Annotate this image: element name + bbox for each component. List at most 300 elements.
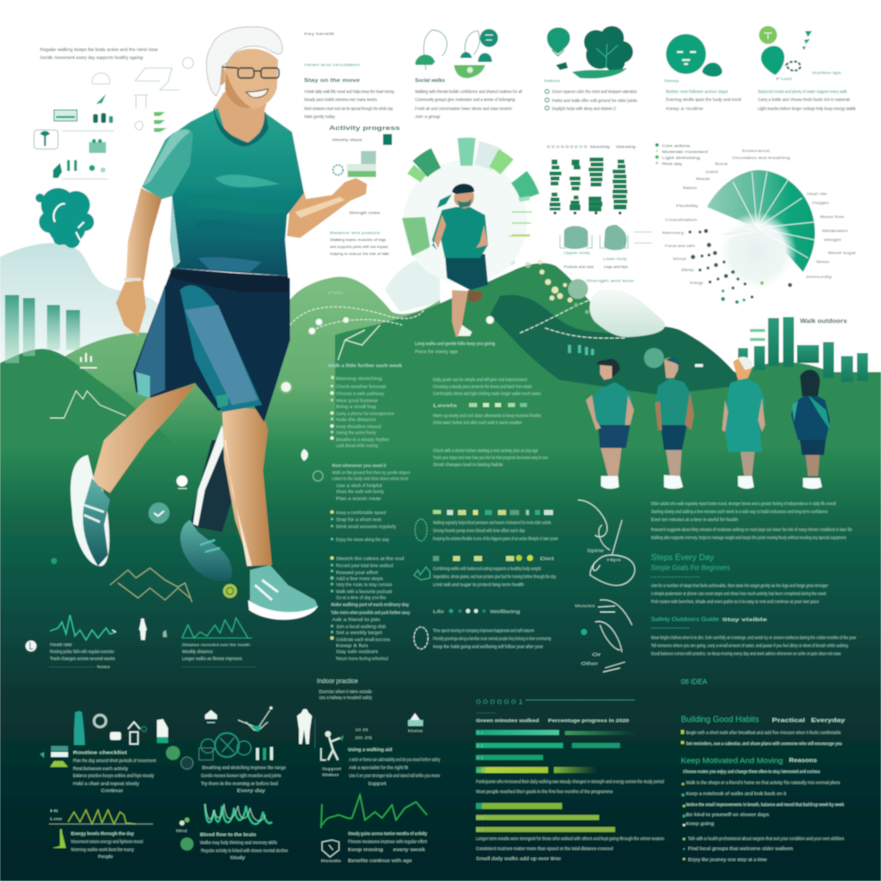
chips row 3 with text: Vegetables, whole grains, and lean protein give fuel for moving further through the day (433, 574, 556, 579)
stacked trees chart: Weekly (616, 144, 636, 149)
checklist column: Add a few more steps (336, 576, 384, 581)
head (224, 49, 278, 109)
right lower panel: key points: Building Good Habits (681, 714, 759, 724)
right lower panel: key points: Everyday (811, 718, 845, 724)
right lower panel: key points: Talk with a health professional about targets that suit your condition and your own abilities (688, 836, 845, 841)
radial chart legend: Rest day (662, 161, 682, 166)
lower panel 3: figures: Walker (322, 772, 340, 777)
bottom sparkline 1: People (98, 854, 113, 859)
checklist column: Join a local walking club (336, 624, 386, 629)
radial chart labels: Energy (690, 280, 703, 285)
checklist column: Record your total time walked (336, 563, 393, 568)
bottom sparkline 3: Results (321, 858, 341, 863)
text: Aim for a number of steps that feels achievable, then raise the target gently as the legs and lungs grow stronger (651, 583, 828, 588)
column 1 heading and text: Join a group (415, 114, 440, 119)
chips row 3 with text: Combining walks with balanced eating supports a healthy body weight (433, 566, 542, 571)
dots row: Wellbeing (490, 609, 521, 614)
sparkline panel 2 (182, 618, 256, 667)
checklist column: Set a weekly target (336, 630, 383, 635)
right lower panel: key points: Set reminders, use a calendar, and share plans with someone who will encourage you (686, 741, 842, 746)
lower panel 3: figures: 20 25 (355, 735, 373, 740)
left hill note (80, 353, 97, 368)
right lower panel: key points: Choose routes you enjoy and change them often to stay interested and curious (683, 769, 820, 774)
lower panel 1: text: Rest between each activity (73, 766, 129, 771)
icon cluster 4 (759, 26, 841, 75)
anatomy labels (575, 548, 621, 666)
checklist column: Wear good footwear (336, 398, 378, 403)
centre text block: column above arm: Key benefit (304, 32, 334, 36)
centre text block: column above arm: Stay on the move (304, 78, 360, 84)
dots row: Friendly greetings along a familiar route remind people they belong to their community (433, 636, 551, 641)
right lower panel: key points: Begin with a short walk after breakfast and add five minutes when it feels comfortable (686, 730, 841, 735)
checklist column: Note the distance (336, 417, 376, 422)
skyline label: Walk outdoors (800, 319, 848, 325)
radial chart labels: Mood (673, 256, 686, 261)
lower panel 1: text: Plan the day around short periods of movement (73, 758, 157, 763)
radial chart labels: Weight (824, 237, 842, 242)
sparkline panel 2: Weekly distance (182, 649, 213, 654)
anatomy labels: Spine (587, 548, 605, 553)
left city skyline (5, 295, 80, 363)
right arm (287, 178, 367, 238)
left arm (126, 188, 162, 280)
heading: steps: Steps Every Day (651, 553, 714, 562)
checklist column: Check weather forecast (336, 384, 387, 389)
bar chart panel: Participants who increased their daily walking saw steady changes in strength and energy across the study period (476, 779, 664, 784)
column 3 text: Evening strolls quiet the body and mind (666, 97, 741, 102)
anatomy labels: Or (592, 652, 602, 657)
bottom sparkline 1: Hi (50, 809, 59, 813)
radial chart labels: Balance (683, 185, 698, 190)
body silhouettes with labels (560, 225, 652, 283)
checklist column: Go at a time of day you like (336, 595, 386, 600)
icon cluster 1 (415, 29, 498, 78)
center column text on hill: Comfortable shoes and light clothing make longer walks much easier (433, 391, 541, 396)
lower section heading: Use a hallway or treadmill safely (319, 695, 373, 700)
radial chart labels: Muscle (696, 176, 711, 181)
anatomy line drawings (578, 500, 635, 672)
bottom sparkline 1: Low (50, 817, 63, 821)
trail route lines (290, 300, 625, 360)
lower panel 3: figures: Support (322, 766, 342, 771)
checklist column: Swing the arms freely (336, 430, 377, 435)
walker 2 (655, 358, 694, 489)
column 1 heading and text: Walking with friends builds confidence and shared routines for all (415, 89, 522, 94)
right lower panel: key points: Keep Motivated And Moving (681, 758, 783, 765)
walker 3 (722, 357, 765, 489)
column 4 text: Carry a bottle and choose fresh foods rich in nutrients (758, 97, 851, 102)
checklist column: Stretch the calves at the end (336, 556, 405, 561)
bottom sparkline 1: Energy levels through the day (71, 831, 134, 836)
checklist column: Breathe in a steady rhythm (336, 437, 389, 442)
checklist column (330, 376, 411, 661)
lower panel 1: text (73, 750, 157, 793)
bar chart panel: Consistent routines matter more than speed or the total distance covered (476, 846, 613, 851)
far leg (190, 440, 232, 532)
centre text block: column above arm: Start gently today (304, 114, 336, 119)
checklist column: Enjoy the views along the way (336, 537, 390, 542)
checklist column: Morning stretching (336, 376, 383, 381)
radial chart labels: Sleep (681, 267, 695, 272)
bar chart panel: Green minutes walked (476, 718, 539, 723)
lower panel 2: icons (199, 706, 273, 760)
brain icon (36, 188, 94, 248)
checklist column: Reward your effort (336, 570, 379, 575)
text under arm: and supports joints with low impact (330, 244, 389, 249)
chips row 2 with text: Strong hearts pump more blood with less effort each day (433, 528, 526, 533)
mountain line chart (110, 568, 192, 602)
right text block with headings (651, 501, 852, 540)
body silhouettes with labels: Posture and core (564, 265, 594, 269)
column 4 text: Light snacks before longer outings help keep energy stable (758, 106, 856, 111)
sparkline panel 1: Track changes across several weeks (50, 656, 116, 661)
top-left outline icons (34, 58, 194, 179)
centre text block: column above arm: Heart and circulation (304, 62, 360, 67)
column 3 text (664, 78, 741, 111)
center column text on hill: Track your steps and note how you feel so that progress becomes easy to see (433, 455, 548, 460)
right lower panel: key points: Keep a notebook of walks and look back on it (686, 791, 787, 796)
center column text on hill: Daily goals can be simple and still give real improvement (433, 377, 528, 382)
bottom sparkline 2: Walks may help thinking and memory skills (200, 840, 278, 845)
sparkline panel 1: Notes (97, 664, 110, 669)
lower panel 3: figures (297, 709, 423, 777)
center column text on hill (328, 291, 548, 467)
right lower panel: key points: Keep going (686, 821, 715, 826)
bar chart panel: Longer term results were strongest for those who walked with others and kept going through the winter season (476, 836, 664, 841)
lower panel 3: text: A stick or frame can add stability and let you travel further safely (349, 757, 440, 762)
sparkline panel 1 (49, 615, 167, 669)
checklist column: Ask a friend to join (332, 617, 381, 622)
column 2 heading and checklist: Daylight helps with sleep and vitamin D (552, 106, 617, 111)
anatomy labels: Muscles (575, 603, 595, 608)
center column text on hill: Choosing a steady pace protects the knees and back from strain (433, 384, 532, 389)
fan chart around small runner (402, 152, 532, 284)
right lower panel: key points: Enjoy the journey one step at a time (688, 857, 767, 862)
checklist column: Celebrate each small success (336, 637, 391, 642)
lower panel 1: icons (40, 711, 193, 769)
text under arm: Walking trains muscles of legs (330, 237, 386, 242)
anatomy labels: Other (581, 661, 599, 666)
hair (206, 27, 282, 96)
lower panel 3: text: Support (368, 781, 387, 786)
radial chart labels: Stress (816, 259, 829, 264)
checklist column: Stay safe outdoors (336, 649, 379, 654)
bar chart panel: 06 (477, 816, 483, 820)
bar chart panel: 04 (477, 769, 483, 773)
lower panel 3: text: Using a walking aid (348, 747, 392, 752)
bottom sparkline 1: Movement raises energy and lightens mood (71, 839, 143, 844)
chips row 3 with text (433, 555, 556, 587)
right lower panel: key points: Walk to the shops or a friend's home so that activity fits naturally into normal plans (686, 780, 841, 785)
chips row 2 with text (433, 510, 558, 541)
smile (246, 89, 268, 98)
bar chart panel: 01 (477, 731, 483, 735)
right lower panel: key points (681, 679, 845, 862)
sparkline panel 2: Longer walks as fitness improves (182, 656, 243, 661)
radial chart labels: Immunity (806, 274, 832, 279)
bottom sparkline 2: Regular activity is linked with slower mental decline (201, 848, 288, 853)
heading: steps (651, 553, 730, 572)
column 3 text: Better rest follows active days (666, 89, 729, 94)
lower panel 2: text: Try them in the morning or before bed (201, 781, 278, 786)
checklist column: Share the walk with family (336, 489, 385, 494)
radial chart (707, 170, 815, 292)
lower panel 3: text: Ask a specialist for the right fit (349, 765, 409, 770)
radial chart legend (655, 143, 709, 166)
small hill bubbles and bars (568, 329, 765, 368)
text under arm: Strength notes (349, 211, 380, 215)
column 2 heading and checklist: Nature (544, 78, 561, 83)
heading: steps: Simple Goals For Beginners (651, 565, 730, 572)
center column text on hill: Small changes lead to lasting habits (433, 462, 504, 467)
center column text on hill: Check with a doctor before starting a new activity plan at any age (433, 448, 538, 453)
checklist column: Keep a comfortable speed (336, 510, 386, 515)
center column text on hill: Drink water before and after each walk in warm weather (433, 420, 522, 425)
radial chart labels: Bone (715, 161, 729, 166)
checklist column: Keep shoulders relaxed (336, 424, 381, 429)
top-left caption (40, 47, 158, 60)
column 3 text: Keep a routine (666, 106, 704, 111)
center column text on hill: Long walks and gentle hills keep you going (415, 341, 495, 346)
small circular icons in field (26, 381, 323, 652)
sparkline panel 1: Heart rate (50, 642, 72, 647)
small runner (432, 184, 488, 337)
icon cluster 2: tree and balloon (547, 26, 633, 79)
checklist column: Choose a safe pathway (336, 391, 385, 396)
text under arm (330, 211, 389, 256)
radial chart labels: Joint (705, 169, 719, 174)
checklist column: Listen to the body and slow down when tired (332, 476, 408, 481)
leaf icon (414, 567, 430, 580)
lower panel 2: text: Every day (237, 788, 266, 793)
stacked trees chart: Monthly (590, 144, 610, 149)
column 4 text: Fuel (776, 76, 792, 81)
sparkline panel 1: Resting pulse falls with regular exercise (50, 649, 114, 654)
column 2 heading and checklist (544, 78, 638, 111)
right city skyline (738, 317, 868, 382)
bar chart panel: 0 0 0 0 0 0 1 (476, 700, 524, 706)
sparkline panel 2: Distance recorded over the month (182, 642, 250, 647)
column 1 heading and text: Fresh air and conversation lower stress and ease tension (415, 106, 512, 111)
bar chart panel: 02 (477, 744, 483, 748)
lower panel 1: text: Continue (101, 788, 124, 793)
bottom sparkline 2 (176, 804, 288, 860)
bar chart panel: Small daily walks add up over time (476, 856, 562, 861)
chips row 2 with text: Keeping the arteries flexible is one of the biggest gains of an active lifestyle in later years (433, 536, 558, 541)
radial chart labels (662, 148, 857, 285)
text under arm: Balance and posture (330, 230, 381, 235)
lower panel 2: text (201, 765, 286, 793)
right lower panel: key points: Reasons (789, 758, 817, 764)
column 4 text (758, 76, 856, 111)
checklist column: Carry a phone for emergencies (336, 411, 395, 416)
ear (216, 67, 226, 85)
dots row: Keep the habit going and wellbeing will follow year after year (433, 644, 543, 649)
center column text on hill: Walk a little further each week (328, 363, 403, 368)
center column text on hill: Pace for every age (415, 349, 458, 354)
lower panel 1: text: Routine checklist (73, 750, 128, 755)
bar chart panel (476, 700, 664, 861)
radial chart labels: Focus and calm (665, 243, 696, 248)
lower panel 3: text (348, 747, 440, 786)
checklist column: Rest whenever you need it (332, 463, 386, 468)
radial chart labels: Endurance (742, 148, 771, 153)
lower section heading: Indoor practice (317, 679, 359, 685)
subheading: safety: Safety Outdoors Guide (651, 617, 719, 623)
anatomy labels: Hips (607, 557, 621, 562)
bar chart panel: 03 (477, 756, 483, 760)
radial chart legend: Moderate movement (662, 149, 709, 154)
checklist column: Stop for a short rest (336, 517, 382, 522)
bottom sparkline 3: Keep moving (348, 847, 384, 852)
radial chart labels: Heart rate (807, 191, 828, 196)
bottom sparkline 3 (321, 795, 428, 863)
column 2 heading and checklist: Parks and trails offer soft ground for older joints (552, 98, 638, 103)
radial chart labels: Oxygen (812, 200, 829, 205)
glasses (222, 67, 279, 78)
column 1 heading and text: Community groups give motivation and a sense of belonging (415, 97, 515, 102)
neck (214, 92, 270, 144)
center column text on hill: Warm up slowly and cool down afterwards to keep muscles flexible (433, 413, 541, 418)
lower panel 3: figures: Home (408, 729, 423, 733)
left ridge line (50, 391, 126, 418)
right lower panel: key points: Find local groups that welcome older walkers (688, 846, 794, 851)
radial chart labels: Blood sugar (828, 250, 857, 255)
radial chart labels: Metabolism (822, 228, 849, 233)
icon cluster 4: Nutrition tips (812, 70, 841, 75)
bar chart panel: 07 (477, 828, 483, 832)
bar chart panel: Percentage progress in 2020 (548, 718, 630, 723)
bottom sparkline 2: Study (230, 855, 246, 860)
column 3 text: Sleep (664, 78, 680, 83)
t-shirt (142, 108, 304, 276)
subheading: safety (651, 617, 768, 623)
body silhouettes with labels: Lower body (603, 257, 627, 261)
centre text block: column above arm (304, 32, 394, 119)
flowers on the hilltop (503, 249, 589, 314)
chips row 3 with text: Limit salt and sugar to protect long term health (433, 582, 524, 587)
group of four walkers (586, 357, 830, 489)
stacked trees chart: 0 0 0 0 0 0 0 0 0 (547, 144, 588, 149)
shoe: front (250, 565, 318, 617)
body silhouettes with labels: Legs and hips (604, 265, 628, 269)
walker 4 (791, 370, 830, 489)
dots row: Time spent moving in company improves happiness and self esteem (433, 628, 534, 633)
back thigh and calf (92, 384, 196, 493)
checklist column: Bring a small bag (336, 404, 376, 409)
radial chart dots (688, 229, 792, 304)
checklist column: Look ahead while moving (336, 443, 378, 448)
shorts (133, 268, 290, 422)
checklist column: Take stairs when possible and park further away (331, 610, 410, 615)
bottom sparkline 3: Steady gains across twelve months of activity (348, 831, 427, 836)
bar chart panel: Most people reached their goals in the first few months of the programme (476, 789, 613, 794)
centre text block: column above arm: Short sessions count and can be spread through the whole day (304, 106, 393, 111)
subheading: safety: Stay visible (722, 617, 768, 622)
top-left pictograms (40, 94, 167, 178)
checklist column: Walk with a favourite podcast (336, 589, 393, 594)
chips row 2 with text: Walking regularly helps blood pressure and lowers cholesterol for most older adults (433, 520, 551, 525)
centre text block: column above arm: Steady pace builds stamina over many weeks (304, 97, 378, 102)
checklist column: Drink small amounts regularly (336, 524, 397, 529)
lower panel 1: text: Balance practice keeps ankles and hips steady (73, 773, 155, 778)
checklist column: Vary the route to stay curious (336, 582, 393, 587)
small chart with heading: Activity progress (329, 126, 401, 132)
bottom sparkline 2: Mind (176, 829, 187, 833)
lower panel 3: figures: 10 15 (355, 727, 369, 732)
lower panel 2: text: Breathing and stretching improve the range (202, 765, 286, 770)
column 1 heading and text (415, 78, 522, 119)
bottom sparkline 3: Benefits continue with age (348, 858, 413, 863)
bottom sparkline 1 (49, 809, 153, 859)
right lower panel: key points: Notice the small improvements in breath, balance and mood that build up week by week (686, 802, 844, 807)
dots row (433, 609, 551, 649)
chips row 3 with text: Diet (540, 556, 555, 561)
radial chart legend: Core actions (662, 143, 690, 148)
top-left caption: Gentle movement every day supports healthy ageing (40, 55, 143, 60)
dots row: Life (433, 609, 445, 614)
right lower panel: key points: Be kind to yourself on slower days (686, 812, 770, 817)
bottom sparkline 3: every week (393, 847, 426, 852)
bottom sparkline 3: Fitness measures improve with regular effort (348, 839, 428, 844)
walker 1 (586, 359, 634, 489)
front leg (222, 405, 272, 566)
text: A simple pedometer or phone can count steps and show how much activity has been completed during the week (651, 591, 827, 596)
radial chart labels: Flexibility (676, 203, 698, 208)
right lower panel: key points: 08 IDEA (681, 679, 707, 686)
right text block with headings: Even ten minutes at a time is useful for health (651, 517, 738, 522)
column 2 heading and checklist: Green spaces calm the mind and sharpen attention (552, 89, 637, 94)
checklist column: Keep it fun (336, 643, 369, 648)
oval icon 1 (415, 519, 427, 541)
checklist column: Return home feeling refreshed (336, 656, 388, 661)
bottom sparkline 2: Blood flow to the brain (200, 832, 256, 837)
lower panel 3: text: Use it on your stronger side and stand tall while you move (349, 773, 440, 778)
checklist column: Make walking part of each ordinary day (331, 602, 409, 607)
lower section heading: Exercise when it rains outside (319, 689, 372, 694)
main runner: elderly walker (71, 27, 367, 620)
bracelet (124, 278, 141, 281)
legend chips row 1 (433, 403, 527, 408)
body silhouettes with labels: Strength and tone (586, 278, 635, 283)
column 4 text: Balanced meals and plenty of water support every walk (758, 89, 848, 94)
lower section heading (317, 679, 373, 700)
body silhouettes with labels: Upper body (564, 251, 590, 255)
legend chips row 1: Levels (433, 403, 458, 408)
radial chart labels: Blood flow (820, 214, 844, 219)
text under arm: helping to reduce the risk of falls (330, 251, 389, 256)
left hand (116, 280, 146, 336)
radial chart labels: Circulation and breathing (732, 155, 790, 160)
radial chart labels: Coordination (665, 217, 697, 222)
centre text block: column above arm: A brisk daily walk lifts mood and helps keep the heart strong (304, 89, 394, 94)
text: Pick routes with benches, shade and even paths so it is easy to rest and continue at your own pace (651, 599, 819, 604)
shoe: middle (180, 520, 232, 581)
column 1 heading and text: Social walks (415, 78, 445, 84)
lower panel 2: text: Gentle moves loosen tight muscles and joints (201, 773, 282, 778)
oval icon 2 (414, 627, 428, 649)
stacked trees chart (547, 144, 636, 214)
checklist column: Plan a scenic route (336, 496, 382, 501)
center column text on hill: Path (328, 291, 343, 295)
right lower panel: key points: Practical (772, 718, 806, 724)
icon cluster 3 (666, 34, 722, 77)
checklist column: Use a stick if helpful (336, 483, 382, 488)
radial chart labels: Memory (662, 230, 684, 235)
checklist column: Walk on flat ground first then try gentle slopes (332, 470, 411, 475)
right text block with headings: Starting slowly and adding a few minutes each week is a safe way to build endurance and long term confidence (651, 509, 828, 514)
shoe: rear (71, 455, 110, 566)
